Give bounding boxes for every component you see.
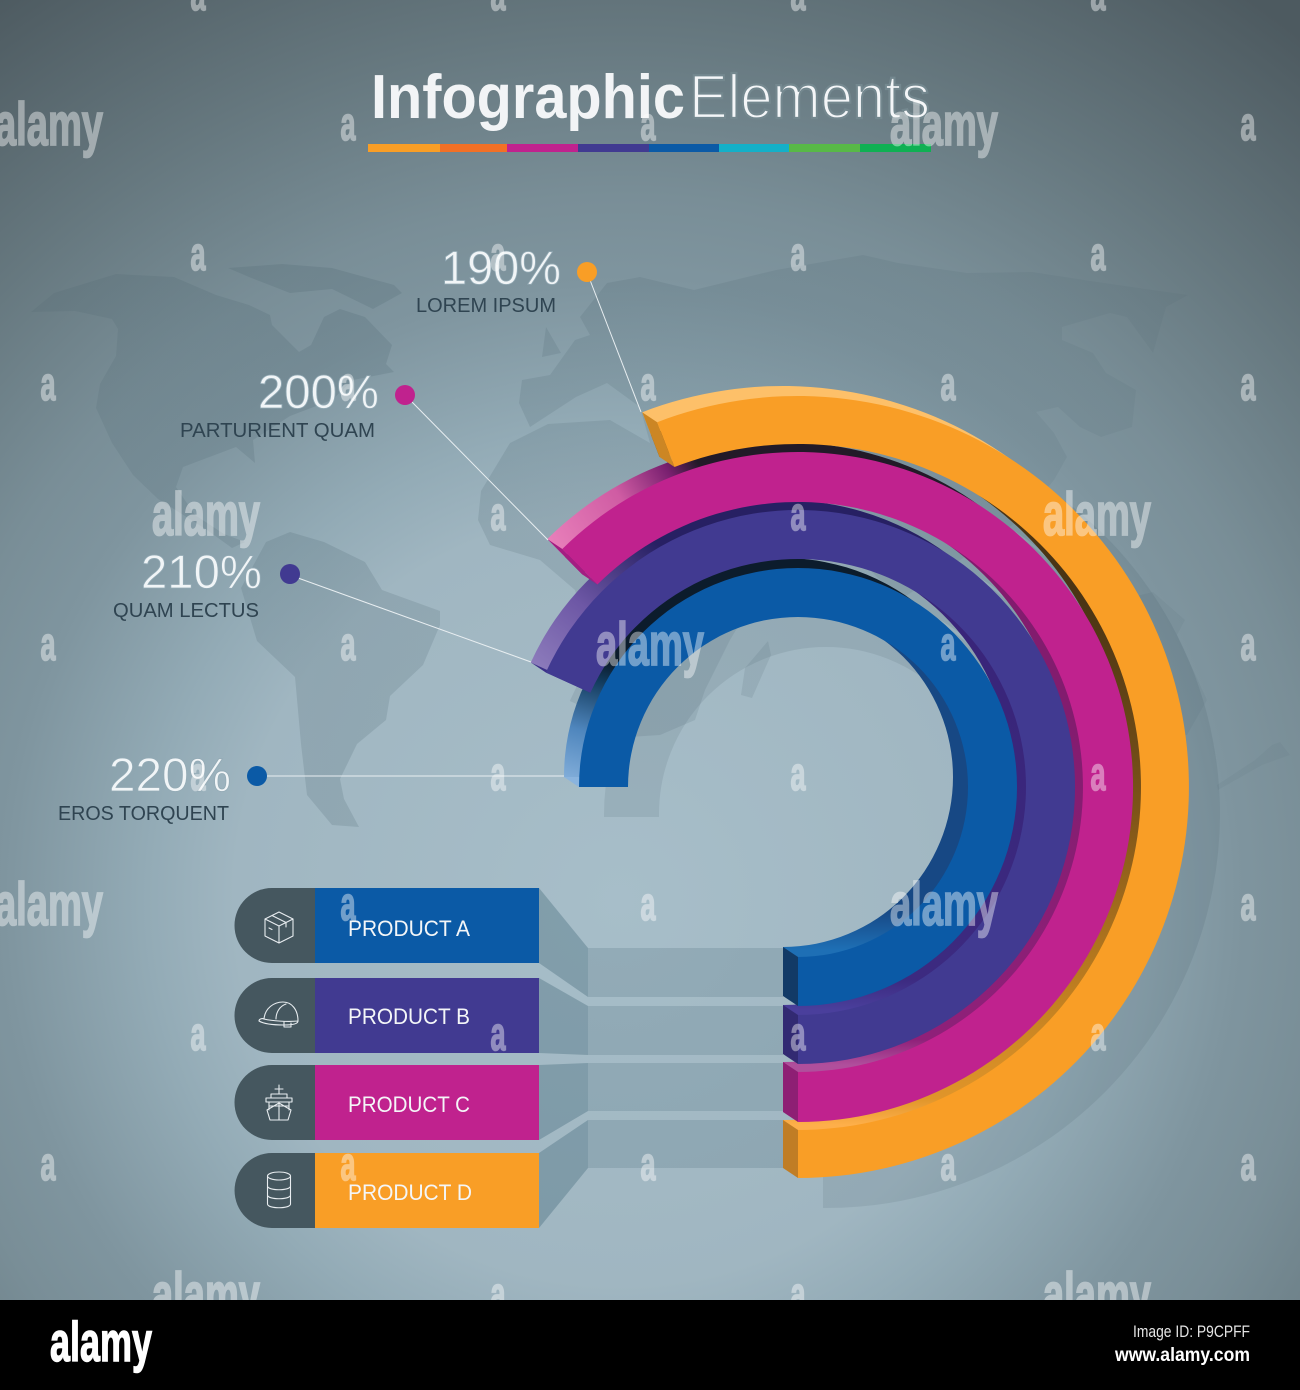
watermark: a — [640, 97, 656, 150]
ring: blue 220% — [564, 558, 1017, 1006]
watermark: a — [40, 617, 56, 670]
callout: 200% parturient quam: 200% — [258, 365, 379, 418]
watermark: a — [1090, 1007, 1106, 1060]
watermark: alamy — [596, 611, 704, 678]
watermark: alamy — [890, 91, 998, 158]
watermark: a — [490, 1267, 506, 1320]
watermark: a — [190, 1007, 206, 1060]
icon: barrel — [268, 1172, 290, 1208]
legend: product A: PRODUCT A — [348, 916, 470, 941]
legend: product A — [235, 888, 539, 963]
connector: product B — [539, 978, 783, 1055]
watermark: a — [640, 357, 656, 410]
watermark: a — [340, 357, 356, 410]
watermark: a — [940, 357, 956, 410]
callout: 200% parturient quam: PARTURIENT QUAM — [180, 420, 375, 442]
title colour bar — [368, 144, 931, 152]
legend: product D: PRODUCT D — [348, 1180, 472, 1205]
watermark: alamy — [890, 871, 998, 938]
map: Africa — [478, 420, 790, 737]
watermark: a — [490, 227, 506, 280]
callout: 200% parturient quam — [180, 365, 548, 540]
watermark: a — [1240, 1137, 1256, 1190]
footer bar — [0, 1300, 1300, 1390]
watermark: a — [40, 1137, 56, 1190]
watermark: a — [490, 487, 506, 540]
callout: 220% eros torquent: 220% — [109, 748, 231, 801]
watermark: alamy — [152, 481, 260, 548]
ring: purple 210% — [531, 500, 1075, 1064]
connector: product D — [539, 1120, 783, 1228]
legend: product B — [235, 978, 539, 1053]
title — [371, 63, 930, 132]
watermark: a — [1240, 357, 1256, 410]
footer bar: Image ID: P9CPFF — [1133, 1322, 1250, 1341]
watermark: a — [340, 877, 356, 930]
watermark: a — [40, 357, 56, 410]
watermark: a — [190, 227, 206, 280]
watermark: a — [1240, 877, 1256, 930]
map: Madagascar — [741, 641, 771, 698]
watermark: a — [490, 747, 506, 800]
connector: product A — [539, 888, 783, 997]
callout: 190% lorem ipsum — [416, 241, 641, 412]
watermark: alamy — [152, 1261, 260, 1328]
watermark: a — [1240, 617, 1256, 670]
map: Arctic islands — [228, 264, 402, 309]
watermark: alamy — [1043, 481, 1151, 548]
legend: product B: PRODUCT B — [348, 1004, 470, 1029]
watermark: a — [1090, 747, 1106, 800]
world map — [31, 255, 1290, 827]
watermark: a — [490, 1007, 506, 1060]
connectors — [539, 888, 783, 1228]
legend: product D — [235, 1153, 539, 1228]
callout: 220% eros torquent: EROS TORQUENT — [58, 803, 229, 825]
watermark: a — [790, 747, 806, 800]
watermark: a — [790, 1267, 806, 1320]
connector: product C — [539, 1063, 783, 1140]
legend: product C — [235, 1065, 539, 1140]
watermark: a — [940, 1137, 956, 1190]
callout: 210% quam lectus: 210% — [141, 545, 262, 598]
watermark: alamy — [0, 871, 103, 938]
map: North America — [31, 274, 394, 548]
icon: hard hat — [259, 1002, 298, 1027]
title: Infographic — [371, 63, 685, 132]
map: Britain — [542, 327, 561, 357]
icon: ship — [266, 1085, 292, 1120]
watermark: a — [340, 97, 356, 150]
ring: magenta 200% — [547, 442, 1133, 1122]
watermark: a — [790, 227, 806, 280]
legend: product C: PRODUCT C — [348, 1092, 470, 1117]
callout: 220% eros torquent — [58, 748, 564, 825]
callout: 190% lorem ipsum: LOREM IPSUM — [416, 295, 556, 317]
callout: 210% quam lectus: QUAM LECTUS — [113, 600, 259, 622]
footer bar: www.alamy.com — [1114, 1345, 1250, 1366]
map: South America — [241, 532, 440, 827]
watermark: a — [1240, 97, 1256, 150]
watermark: a — [190, 747, 206, 800]
watermark: alamy — [1043, 1261, 1151, 1328]
title: Elements — [689, 63, 930, 132]
ring: orange 190% — [642, 386, 1189, 1178]
map: Australia — [1120, 592, 1207, 740]
watermark: a — [640, 1137, 656, 1190]
watermark: alamy — [0, 91, 103, 158]
callout: 210% quam lectus — [113, 545, 531, 662]
watermark: a — [340, 1137, 356, 1190]
callout: 190% lorem ipsum: 190% — [441, 241, 561, 294]
watermark: a — [640, 877, 656, 930]
watermark: a — [790, 1007, 806, 1060]
footer bar: alamy — [50, 1310, 152, 1373]
map: Eurasia — [519, 255, 1188, 600]
ring shadow — [574, 423, 1217, 1205]
map: New Zealand — [1217, 742, 1290, 790]
icon: box — [265, 912, 293, 943]
ring inner walls — [553, 410, 1150, 1144]
watermark: a — [940, 617, 956, 670]
watermark: a — [790, 487, 806, 540]
watermark: a — [340, 617, 356, 670]
watermark: a — [1090, 227, 1106, 280]
